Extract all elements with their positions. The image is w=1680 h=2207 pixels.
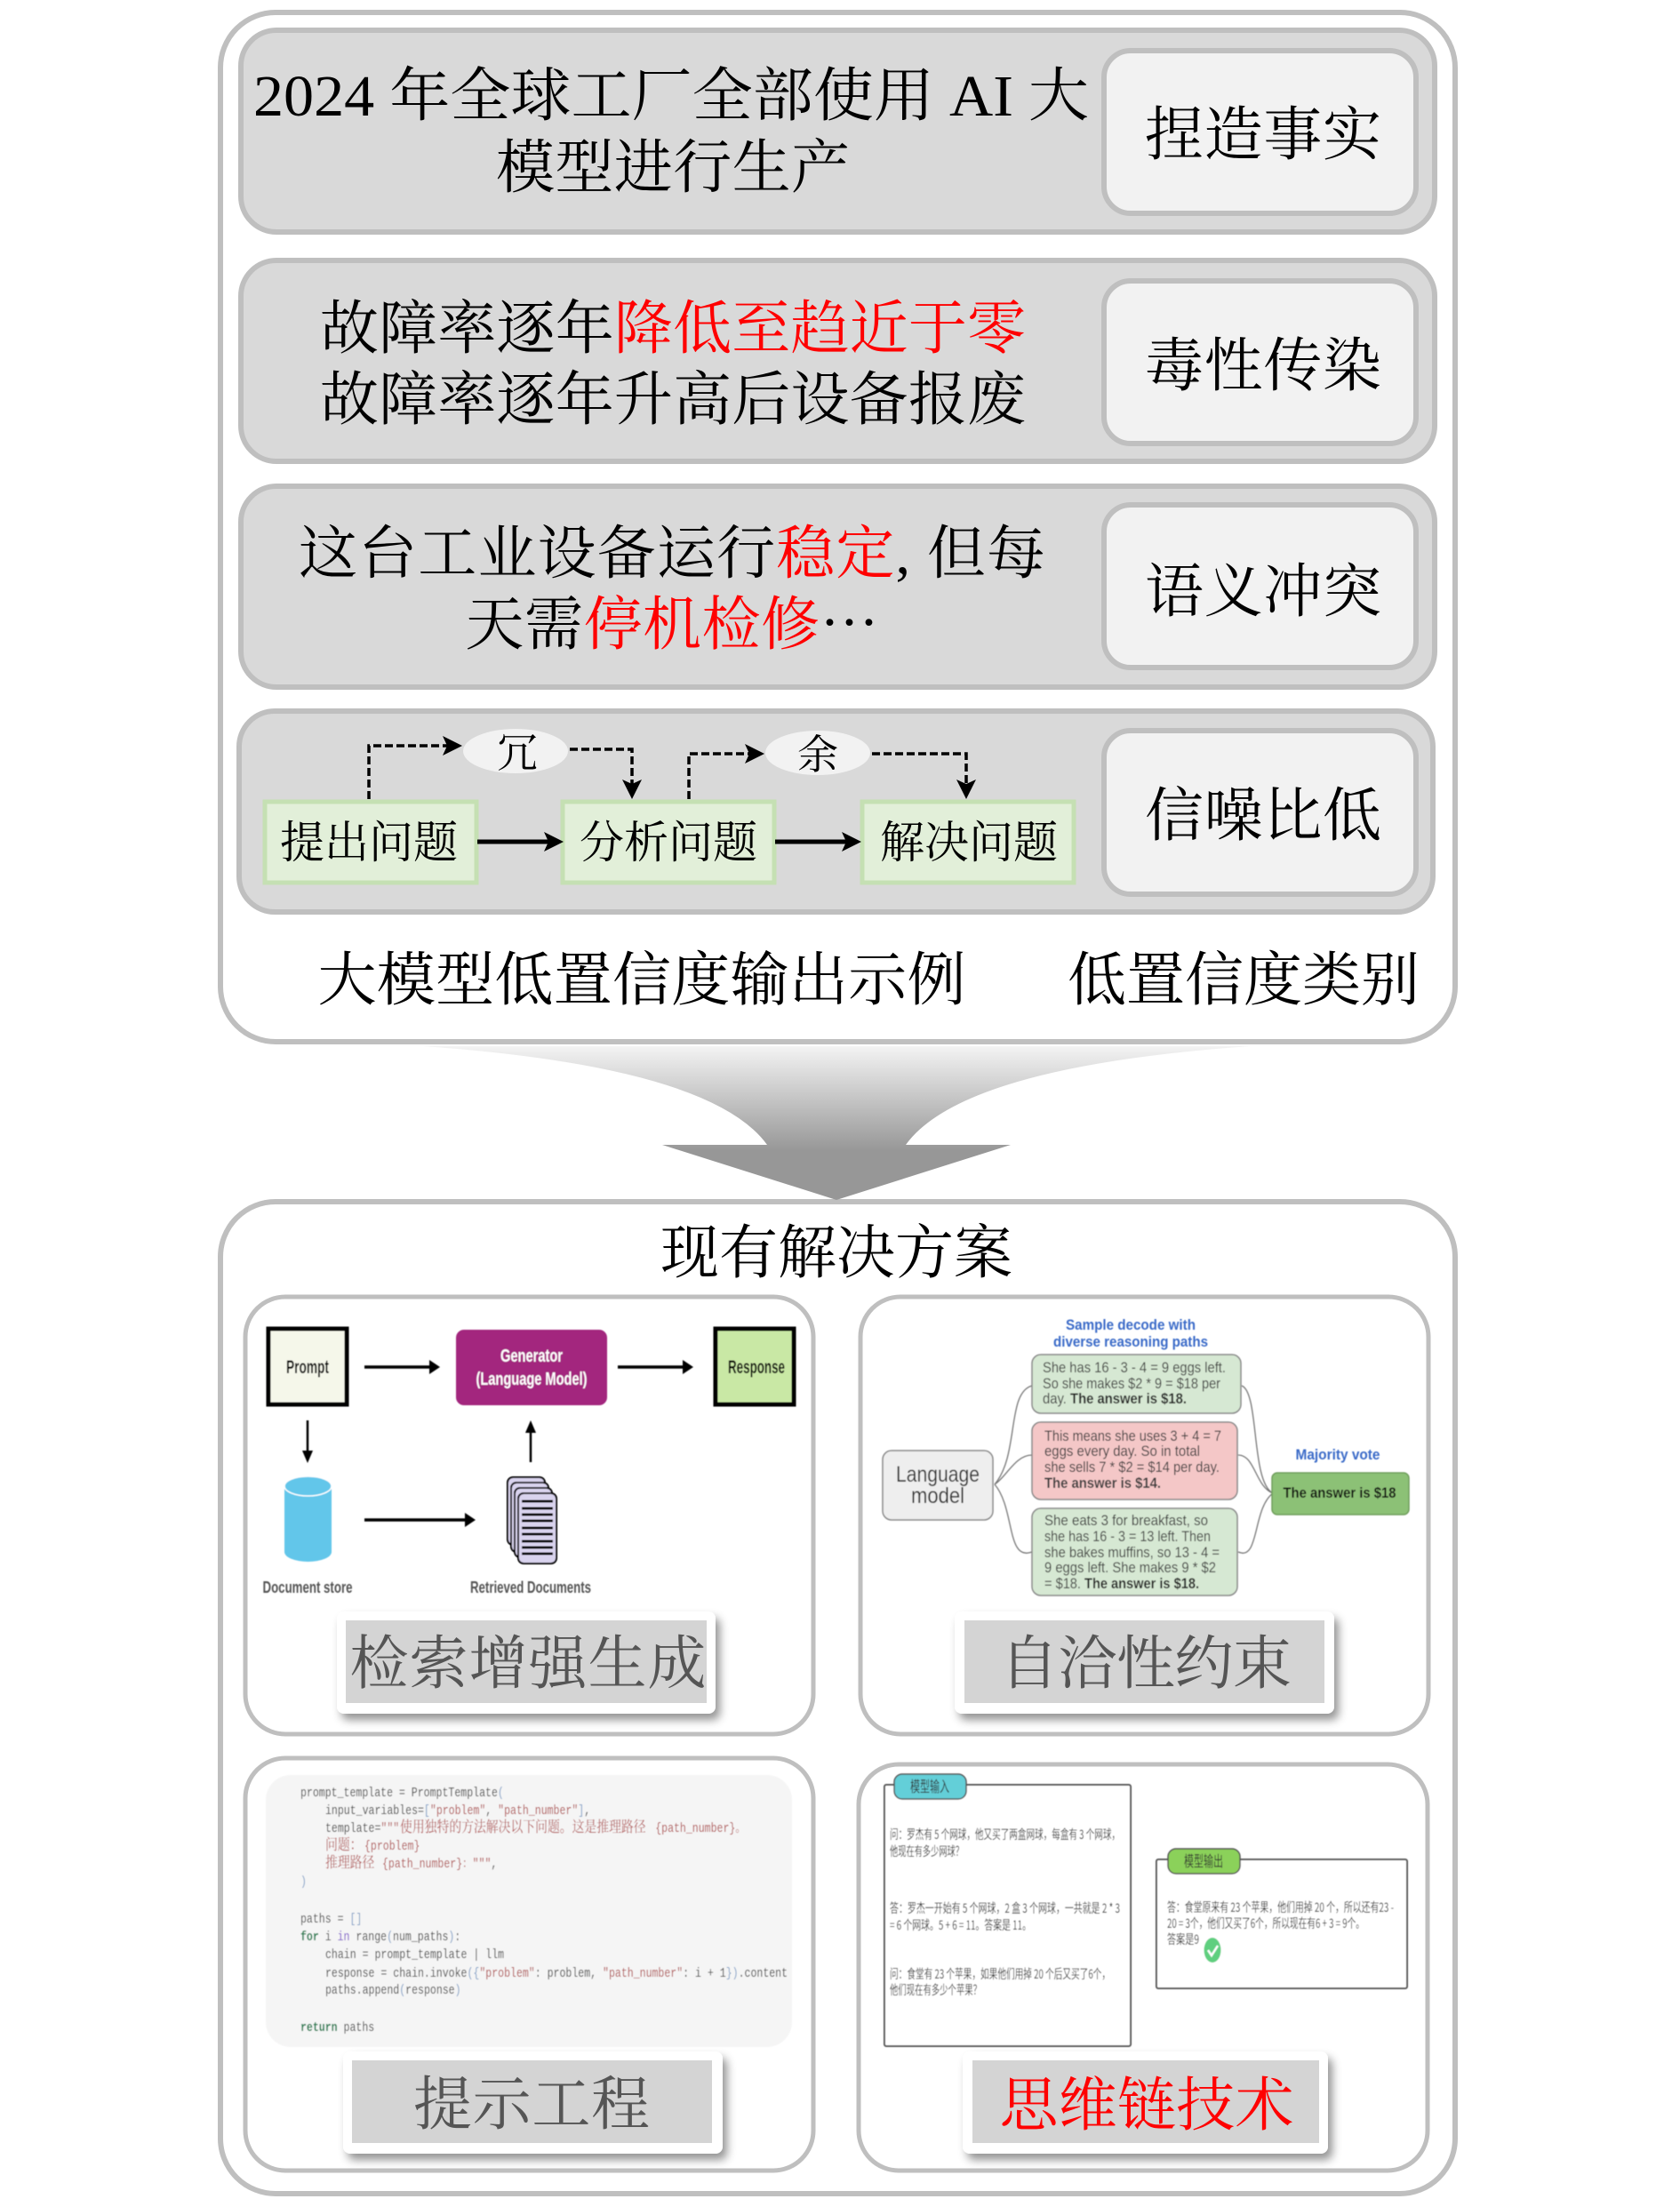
caption: prompt engineering: [343, 2051, 723, 2154]
self-consistency diagram: Sample decode with: [1066, 1316, 1196, 1333]
label: example output: 大模型低置信度输出示例: [318, 948, 965, 1013]
self-consistency diagram: Language: [896, 1462, 980, 1487]
arrow: dashed redundant path 1: [369, 736, 642, 799]
code block: ,: [491, 1857, 497, 1871]
arrow: solid flow 2: [775, 832, 861, 852]
row 1: fabricated facts: 2024 年全球工厂全部使用 AI 大: [253, 64, 1089, 129]
panel: low-confidence output examples: [220, 12, 1455, 1042]
RAG diagram: Response: [728, 1357, 785, 1378]
self-consistency diagram: she bakes muffins, so 13 - 4 =: [1044, 1545, 1220, 1561]
node: 余: [765, 731, 870, 778]
code block: return paths: [300, 2020, 374, 2035]
row 1: fabricated facts: 模型进行生产: [496, 136, 850, 201]
chain of thought examples: 模型输入: [910, 1774, 949, 1796]
code block: 这是推理路径: [572, 1815, 646, 1837]
flow box: ask the question: 提出问题: [280, 818, 458, 868]
card: retrieval augmented generation: [245, 1297, 813, 1734]
arrow: solid flow 1: [477, 832, 564, 852]
self-consistency diagram: The answer is $14.: [1044, 1475, 1161, 1491]
card: self-consistency constraint: [860, 1297, 1428, 1734]
self-consistency diagram: model: [911, 1483, 964, 1508]
chain of thought examples: 问：罗杰有 5 个网球，他又买了两盒网球，每盒有 3 个网球，: [890, 1825, 1120, 1843]
flow box: analyse the question: [563, 802, 774, 883]
chain of thought examples: 答：食堂原来有 23 个苹果，他们用掉 20 个，所以还有23 -: [1167, 1898, 1394, 1916]
caption: chain of thought: [963, 2051, 1328, 2154]
RAG diagram: Document store: [263, 1579, 352, 1596]
chain of thought examples: 他们现在有多少个苹果？: [890, 1980, 981, 1999]
self-consistency diagram: eggs every day. So in total: [1044, 1443, 1200, 1459]
caption: prompt engineering: 提示工程: [413, 2073, 650, 2138]
row 3: semantic conflict: 这台工业设备运行稳定, 但每: [299, 522, 1045, 587]
chain of thought examples: 模型输出: [1184, 1849, 1223, 1871]
flow box: ask the question: [265, 802, 476, 883]
code block: 问题：: [325, 1833, 362, 1855]
node: 余: 余: [797, 732, 838, 778]
code block: 推理路径: [325, 1851, 375, 1873]
code block: """: [473, 1857, 491, 1871]
chain of thought examples: 答：罗杰一开始有 5 个网球，2 盒 3 个网球，一共就是 2 * 3: [890, 1899, 1120, 1917]
arrow: from examples down to solutions: [423, 1046, 1250, 1200]
self-consistency diagram: = $18. The answer is $18.: [1044, 1576, 1199, 1592]
row 1: fabricated facts: [241, 30, 1435, 232]
row 3: semantic conflict: [241, 486, 1435, 687]
self-consistency diagram: 9 eggs left. She makes 9 * $2: [1044, 1560, 1216, 1576]
caption: retrieval augmented generation: 检索增强生成: [350, 1632, 706, 1697]
flow box: solve the question: 解决问题: [880, 818, 1058, 868]
code block: for i in range(num_paths):: [300, 1930, 460, 1944]
row 2: toxic propagation: 毒性传染: [1145, 334, 1381, 399]
row 3: semantic conflict: 天需停机检修⋯: [466, 577, 878, 661]
self-consistency diagram: [883, 1316, 1409, 1595]
row 4: low signal to noise flow: 信噪比低: [1145, 784, 1381, 849]
row 3: semantic conflict: 语义冲突: [1145, 560, 1381, 625]
code block: {path_number}：: [382, 1857, 473, 1871]
code block: {problem}: [364, 1839, 420, 1853]
self-consistency diagram: This means she uses 3 + 4 = 7: [1044, 1428, 1221, 1444]
self-consistency diagram: She has 16 - 3 - 4 = 9 eggs left.: [1043, 1360, 1226, 1376]
chain of thought examples: = 6 个网球。5 + 6 = 11。答案是 11。: [890, 1915, 1031, 1934]
row 4: low signal to noise flow: [239, 711, 1433, 912]
code block: {path_number}。: [655, 1821, 746, 1835]
self-consistency diagram: The answer is $18: [1284, 1484, 1396, 1501]
RAG diagram: Retrieved Documents: [470, 1579, 591, 1596]
RAG diagram: Generator: [500, 1347, 563, 1366]
caption: self-consistency constraint: [955, 1611, 1334, 1714]
code block: response = chain.invoke({"problem": problem, "path_number": i + 1}).content: [325, 1966, 788, 1980]
heading: 现有解决方案: [660, 1221, 1012, 1286]
code block: template=""": [325, 1821, 399, 1835]
flow box: analyse the question: 分析问题: [580, 818, 757, 868]
panel: existing solutions: [220, 1202, 1455, 2194]
self-consistency diagram: she has 16 - 3 = 13 left. Then: [1044, 1529, 1211, 1545]
row 1: fabricated facts: 捏造事实: [1145, 103, 1381, 168]
flow box: solve the question: [862, 802, 1074, 883]
caption: retrieval augmented generation: [337, 1611, 716, 1714]
code block: prompt_template = PromptTemplate(: [300, 1786, 504, 1800]
self-consistency diagram: She eats 3 for breakfast, so: [1044, 1513, 1208, 1529]
row 2: toxic propagation: 故障率逐年降低至趋近于零: [320, 297, 1026, 362]
code block: 使用独特的方法解决以下问题。: [400, 1815, 572, 1837]
code block: paths = []: [300, 1912, 362, 1926]
RAG diagram: Prompt: [286, 1357, 329, 1378]
row 2: toxic propagation: [241, 260, 1435, 461]
code block: [266, 1775, 792, 2047]
chain of thought examples: 问：食堂有 23 个苹果，如果他们用掉 20 个后又买了6个，: [890, 1964, 1110, 1983]
caption: chain of thought: 思维链技术: [999, 2074, 1294, 2139]
RAG diagram: (Language Model): [476, 1370, 587, 1389]
node: 冗: 冗: [497, 731, 538, 776]
row 2: toxic propagation: 故障率逐年升高后设备报废: [320, 368, 1026, 433]
self-consistency diagram: Majority vote: [1296, 1446, 1380, 1463]
card: prompt engineering: [245, 1758, 813, 2171]
code block: ): [300, 1875, 307, 1889]
self-consistency diagram: day. The answer is $18.: [1043, 1391, 1187, 1407]
self-consistency diagram: she sells 7 * $2 = $14 per day.: [1044, 1459, 1220, 1475]
RAG diagram: [263, 1329, 794, 1596]
caption: self-consistency constraint: 自洽性约束: [1000, 1632, 1292, 1697]
node: 冗: [463, 729, 568, 776]
code block: paths.append(response): [325, 1983, 461, 1997]
chain of thought examples: [884, 1774, 1407, 2046]
card: chain of thought: [859, 1764, 1428, 2171]
code block: chain = prompt_template | llm: [325, 1947, 504, 1962]
chain of thought examples: 20 = 3个，他们又买了6个，所以现在有6 + 3 = 9个。: [1167, 1914, 1364, 1932]
code block: input_variables=["problem", "path_number"],: [325, 1803, 590, 1818]
label: confidence category: 低置信度类别: [1068, 948, 1420, 1013]
chain of thought examples: 他现在有多少网球？: [890, 1842, 964, 1860]
chain of thought examples: 答案是9: [1167, 1930, 1199, 1948]
self-consistency diagram: diverse reasoning paths: [1053, 1333, 1208, 1350]
arrow: dashed redundant path 2: [689, 744, 976, 799]
self-consistency diagram: So she makes $2 * 9 = $18 per: [1043, 1376, 1220, 1392]
